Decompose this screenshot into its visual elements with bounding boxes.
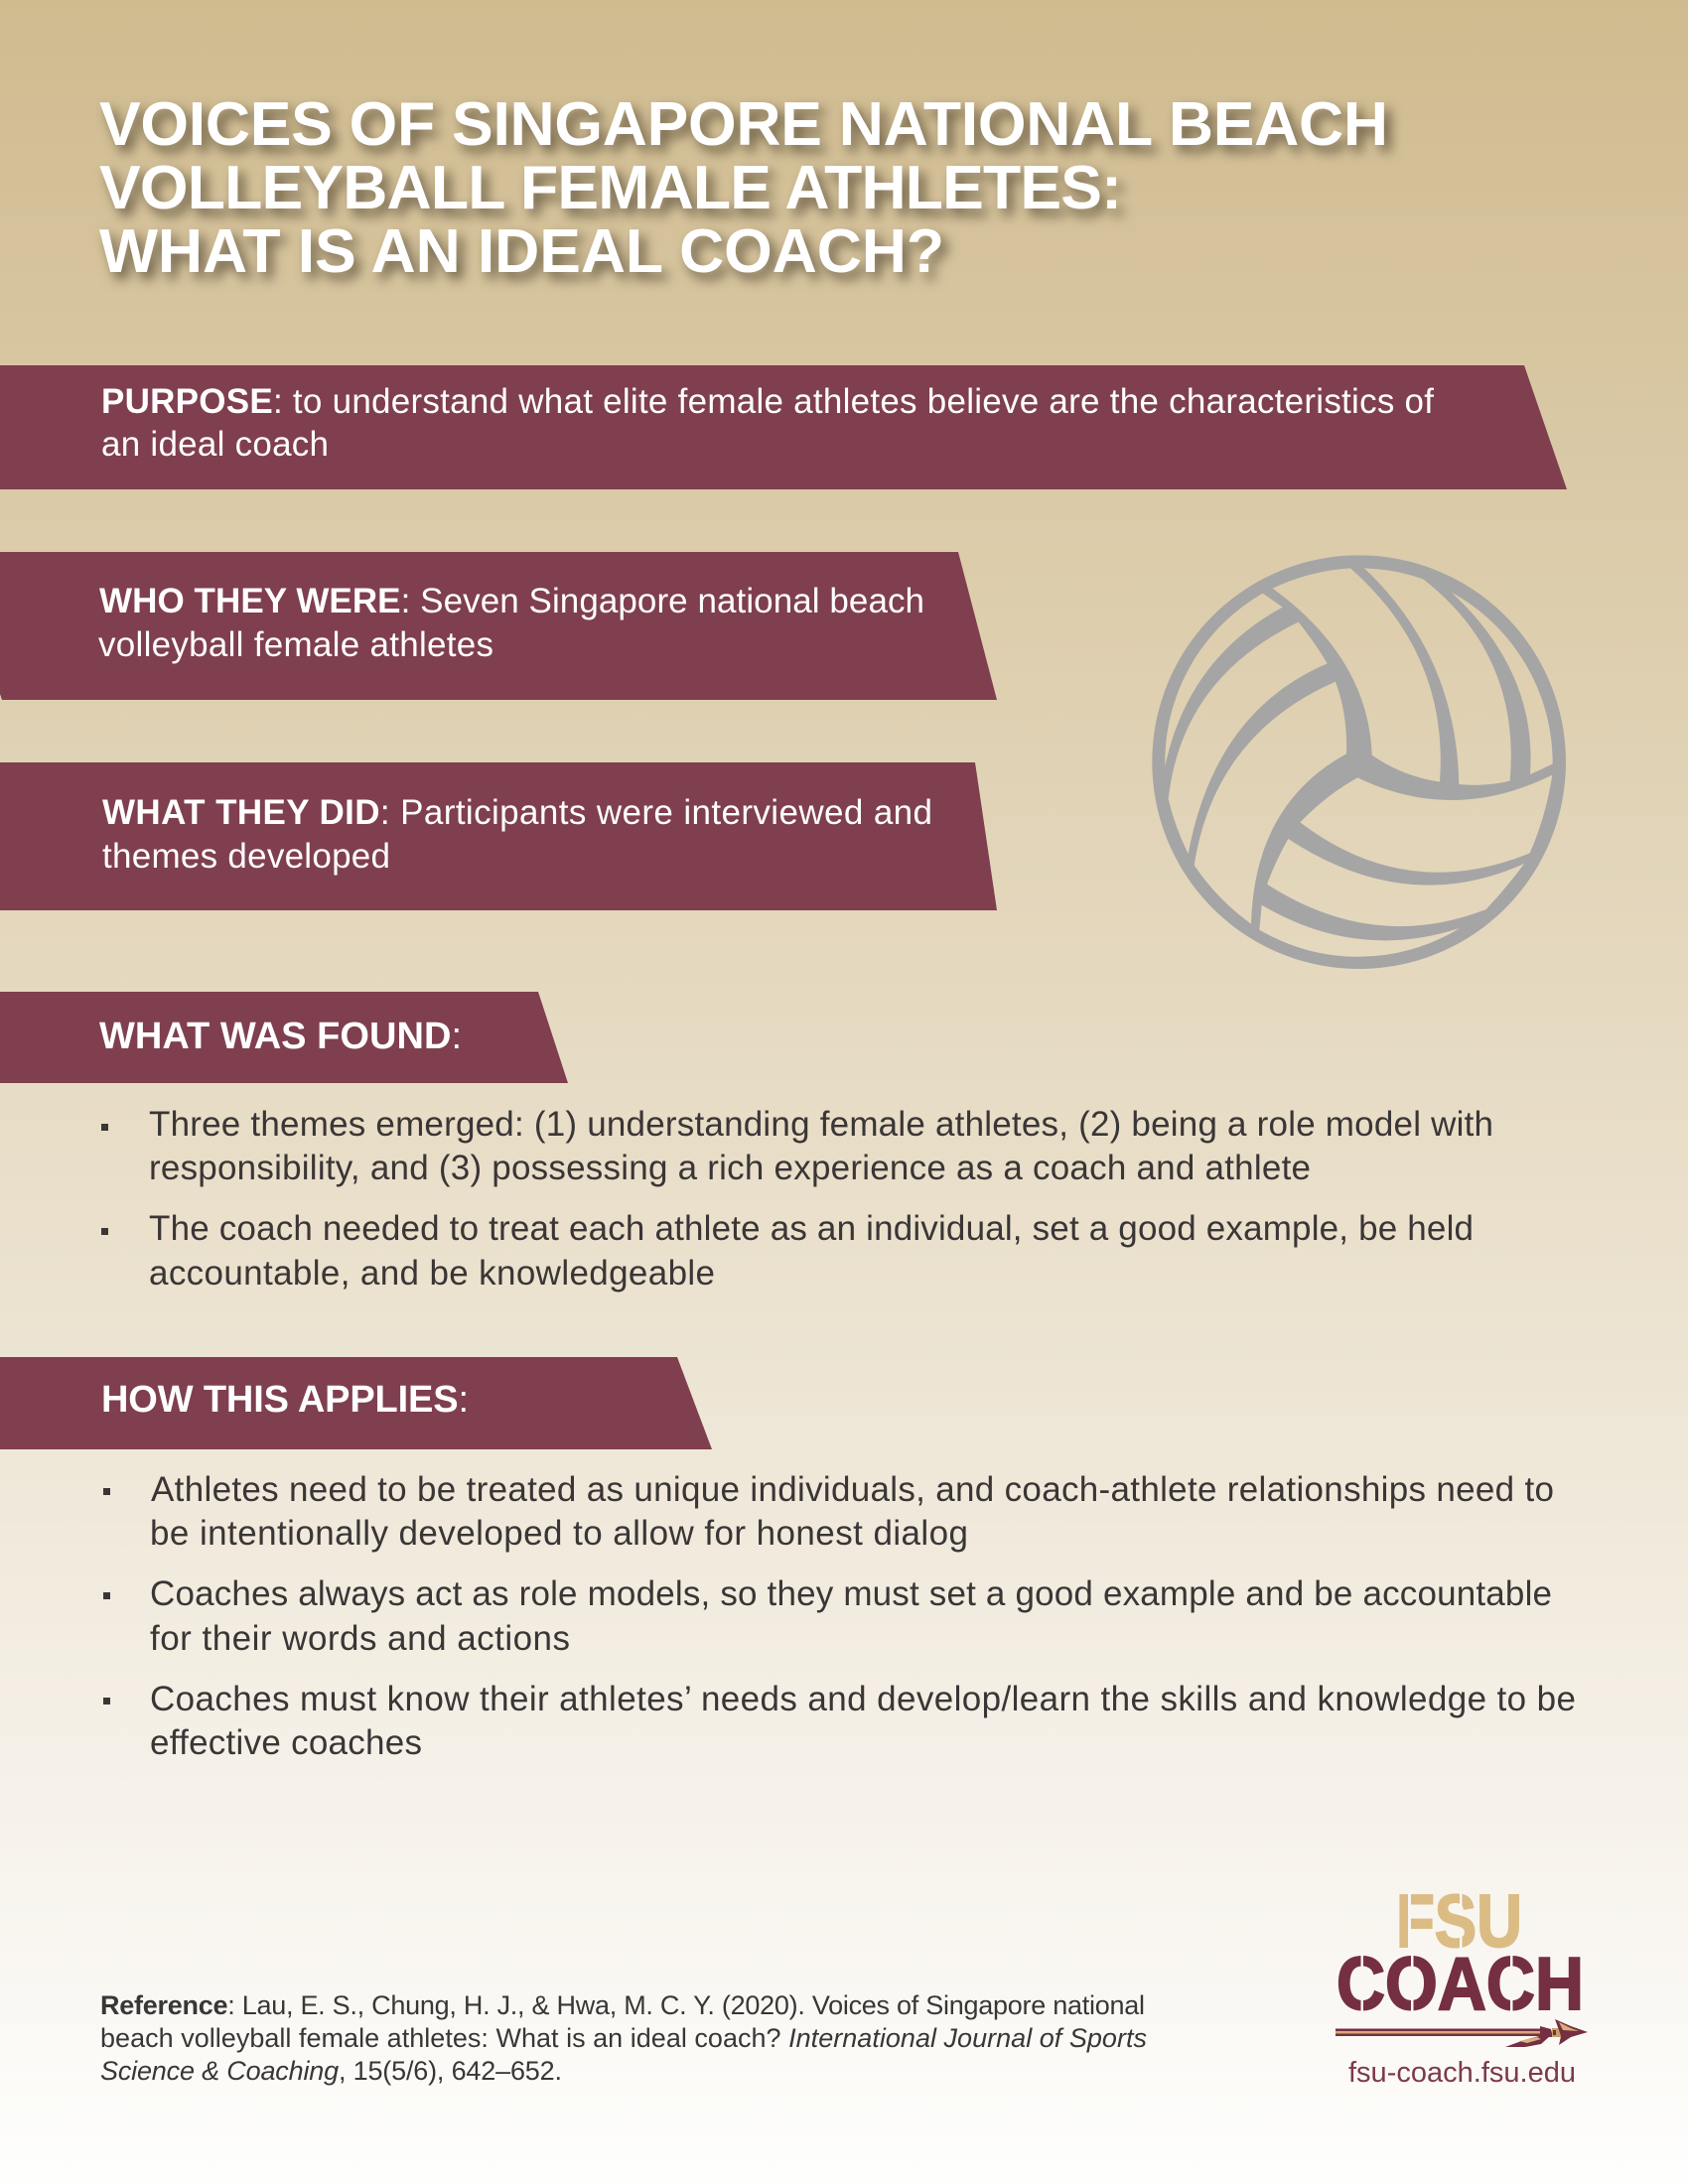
bullet: unique individuals: be intentionally developed to allow for honest dialog: [150, 1514, 968, 1553]
bullet: athletes' needs: Coaches must know their athletes’ needs and develop/learn the skills and knowledge to be: [150, 1680, 1576, 1718]
panel: purpose: an ideal coach: [101, 425, 329, 464]
bullet: role models: Coaches always act as role models, so they must set a good example and be accountable: [150, 1574, 1552, 1613]
logo word: FSU: FSU: [1396, 1879, 1522, 1963]
bullet: themes emerged: [101, 1105, 1493, 1187]
bullet: unique individuals: [103, 1470, 1554, 1553]
panel: what they did: [0, 762, 997, 910]
reference: Science & Coaching, 15(5/6), 642–652.: [100, 2056, 562, 2086]
logo: FSU Coach: [1336, 1879, 1588, 2089]
reference: Reference: Lau, E. S., Chung, H. J., & Hwa, M. C. Y. (2020). Voices of Singapore national: [100, 1990, 1145, 2020]
icon: volleyball: [1152, 555, 1566, 969]
url: fsu-coach.fsu.edu: [1348, 2057, 1576, 2089]
bullet: themes emerged: responsibility, and (3) possessing a rich experience as a coach and athlete: [149, 1149, 1311, 1187]
logo word: COACH: COACH: [1336, 1942, 1584, 2025]
title: WHAT IS AN IDEAL COACH?: [99, 216, 944, 286]
panel: what they did: themes developed: [102, 837, 390, 876]
bullet: athletes' needs: effective coaches: [150, 1723, 422, 1762]
panel: who they were: [0, 552, 997, 700]
bullet: role models: for their words and actions: [150, 1619, 570, 1658]
heading: what was found: [0, 992, 568, 1083]
title: VOICES OF SINGAPORE NATIONAL BEACH: [99, 89, 1388, 159]
bullet: unique individuals: Athletes need to be treated as unique individuals, and coach-athlete relationships need to: [151, 1470, 1554, 1509]
panel: purpose: [0, 365, 1567, 489]
panel: who they were: volleyball female athletes: [98, 625, 493, 664]
bullet: athletes' needs: [103, 1680, 1576, 1762]
panel: what they did: WHAT THEY DID: Participants were interviewed and: [102, 793, 932, 832]
heading: how this applies: [0, 1357, 712, 1449]
text block: applications: [103, 1470, 1576, 1762]
panel: who they were: WHO THEY WERE: Seven Singapore national beach: [99, 582, 924, 620]
bullet: coach needed: The coach needed to treat each athlete as an individual, set a good example, be held: [149, 1209, 1474, 1248]
heading: how this applies: HOW THIS APPLIES:: [101, 1379, 469, 1421]
bullet: coach needed: accountable, and be knowledgeable: [149, 1254, 715, 1293]
panel: purpose: PURPOSE: to understand what elite female athletes believe are the characteristics of: [101, 382, 1434, 421]
title: VOLLEYBALL FEMALE ATHLETES:: [99, 153, 1122, 222]
bullet: role models: [103, 1574, 1552, 1658]
title: [99, 89, 1388, 286]
icon: spear: [1336, 2019, 1588, 2047]
bullet: coach needed: [101, 1209, 1474, 1293]
reference: [100, 1990, 1147, 2086]
text block: findings: [101, 1105, 1493, 1293]
heading: what was found: WHAT WAS FOUND:: [99, 1016, 462, 1057]
bullet: themes emerged: Three themes emerged: (1) understanding female athletes, (2) being a role model with: [149, 1105, 1493, 1144]
reference: beach volleyball female athletes: What is an ideal coach? International Journal of Sports: [100, 2023, 1147, 2053]
